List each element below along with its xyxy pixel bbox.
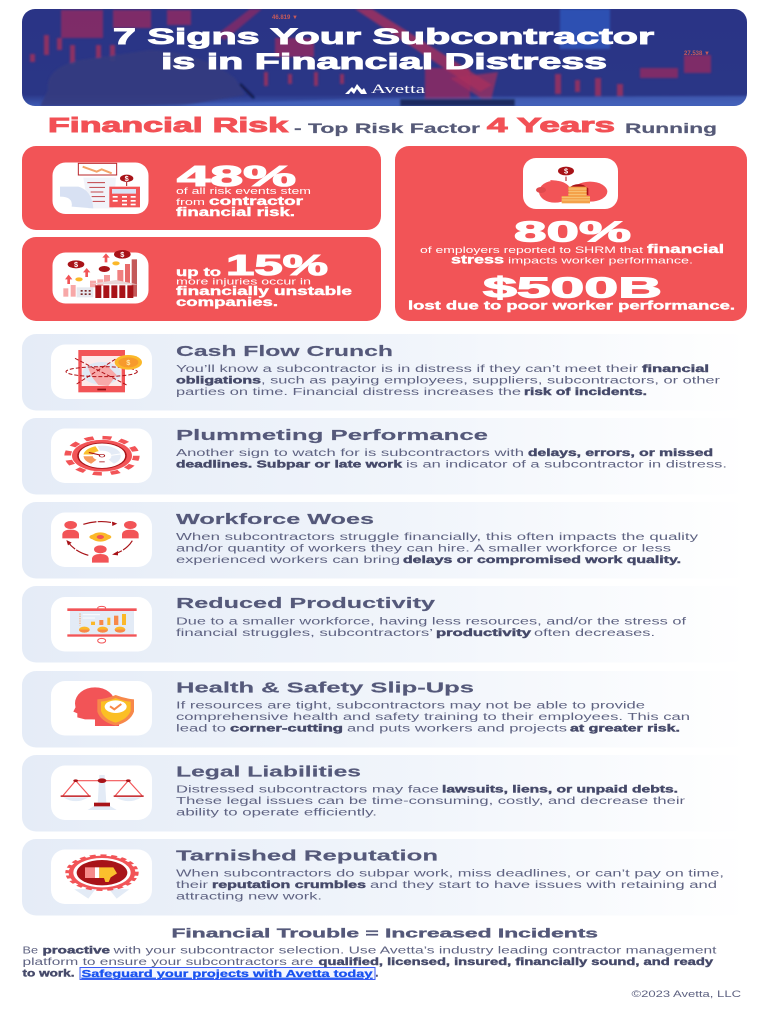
stat text [176, 250, 352, 309]
body text: lead to [176, 724, 227, 734]
body text [176, 616, 686, 639]
subtitle: Financial Risk [48, 115, 290, 137]
stat text: 80%: impacts worker performance. [508, 256, 693, 266]
stat text: of all risk events stem [176, 186, 311, 197]
subtitle: 4 Years [487, 115, 615, 137]
body text: at greater risk. [570, 724, 680, 734]
icon: phone with coin [51, 344, 152, 399]
panel: Tarnished Reputation [22, 839, 748, 916]
banner background image [22, 9, 747, 106]
panel: Cash Flow Crunch [22, 334, 748, 410]
panel: 15% stat [22, 237, 381, 321]
panel: Legal Liabilities [22, 755, 748, 832]
icon: scales of justice [51, 766, 152, 820]
closing paragraph [22, 946, 717, 980]
body text: financial [642, 364, 709, 375]
icon: growth chart and bank: $ [120, 250, 124, 259]
panel: 80% and $500B stats [395, 146, 747, 321]
body text: reputation crumbles [212, 880, 367, 891]
body text: When subcontractors struggle financially, this often impacts the quality [176, 532, 698, 543]
body text: experienced workers can bring [176, 555, 400, 566]
body text: lawsuits, liens, or unpaid debts. [442, 784, 678, 796]
subtitle: - Top Risk Factor [294, 120, 481, 136]
body text: , such as paying employees, suppliers, subcontractors, or other [261, 376, 721, 386]
body text: ability to operate efficiently. [176, 808, 377, 818]
closing heading: Financial Trouble = Increased Incidents [172, 926, 598, 940]
body text: and puts workers and projects [347, 724, 567, 734]
stat text: $500B: $500B [483, 272, 662, 304]
body text: obligations [176, 376, 262, 386]
body text: parties on time. Financial distress increases the [176, 387, 522, 398]
panel: Workforce Woes [22, 502, 748, 578]
body text: and/or quantity of workers they can hire. A smaller workforce or less [176, 544, 671, 554]
closing paragraph: . [376, 968, 378, 980]
heading: Tarnished Reputation [176, 848, 438, 864]
closing paragraph: with your subcontractor selection. Use Avetta’s industry leading contractor management [112, 946, 717, 956]
icon: invoice and calculator [52, 162, 148, 214]
closing paragraph: Be [22, 946, 39, 956]
body text: If resources are tight, subcontractors may not be able to provide [176, 700, 646, 712]
body text [176, 868, 724, 902]
stat text: $500B: lost due to poor worker performance. [408, 300, 735, 312]
stat text: 80%: stress [451, 254, 504, 266]
body text: Another sign to watch for is subcontractors with [176, 448, 524, 459]
stat text: 48% [177, 161, 296, 193]
stat text: 15% [226, 250, 328, 282]
body text [176, 364, 721, 398]
stat text: 80%: financial [647, 244, 724, 256]
body text [176, 700, 690, 734]
body text: delays or compromised work quality. [403, 555, 681, 566]
Avetta logo: Avetta [371, 81, 425, 96]
icon: head with shield [51, 681, 152, 736]
stat text: companies. [176, 297, 278, 309]
icon: invoice and calculator: $ [125, 174, 129, 183]
body text: Distressed subcontractors may face [176, 784, 440, 796]
copyright: ©2023 Avetta, LLC [632, 989, 741, 1000]
stat text [176, 161, 311, 219]
stat text: up to [176, 267, 221, 279]
stat text: $500B [408, 272, 735, 312]
stat text: financial risk. [176, 207, 295, 219]
header banner [22, 9, 747, 106]
heading: Workforce Woes [176, 511, 374, 528]
link: Safeguard your projects [80, 968, 375, 980]
panel: Reduced Productivity [22, 586, 748, 662]
subtitle [48, 115, 717, 137]
body text: productivity [436, 628, 532, 639]
stat text: 80%: of employers reported to SHRM that [420, 245, 644, 256]
body text [176, 784, 686, 818]
heading: Legal Liabilities [176, 764, 361, 780]
stat text: contractor [209, 196, 304, 208]
title: 7 Signs Your Subcontractor [113, 24, 655, 49]
Avetta logo [345, 81, 425, 96]
subtitle: Running [625, 120, 717, 136]
body text: attracting new work. [176, 892, 322, 902]
icon: thumbs-down badge [51, 850, 152, 904]
link: Safeguard your projects: Safeguard your projects with Avetta today [82, 969, 373, 980]
heading: Health & Safety Slip-Ups [176, 680, 474, 696]
closing paragraph: to work. [22, 968, 75, 980]
title: is in Financial Distress [161, 49, 607, 74]
closing paragraph: qualified, licensed, insured, financially sound, and ready [318, 957, 714, 968]
panel: Plummeting Performance [22, 418, 748, 494]
panel: 48% stat [22, 146, 381, 230]
body text: deadlines. Subpar or late work [176, 460, 403, 470]
heading: Cash Flow Crunch [176, 343, 393, 360]
closing paragraph: platform to ensure your subcontractors are [22, 957, 314, 968]
body text [176, 532, 698, 566]
body text: is an indicator of a subcontractor in distress. [406, 460, 727, 470]
icon: gauge gear [51, 428, 152, 483]
title [113, 24, 655, 74]
icon: phone with coin: $ [126, 358, 130, 367]
heading: Reduced Productivity [176, 595, 436, 612]
stat text: from [176, 197, 205, 208]
stat text: 80%: 80% [514, 216, 631, 248]
body text: their [176, 880, 209, 891]
closing paragraph: proactive [42, 946, 111, 956]
body text: and they start to have issues with retaining and [370, 880, 717, 891]
body text: comprehensive health and safety training to their employees. This can [176, 712, 690, 723]
stat text: more injuries occur in [176, 276, 311, 288]
heading: Plummeting Performance [176, 427, 488, 444]
stat text: 80% [420, 216, 724, 266]
stat text: financially unstable [176, 286, 352, 298]
body text: often decreases. [534, 628, 655, 639]
body text: corner-cutting [230, 724, 343, 734]
body text: financial struggles, subcontractors’ [176, 628, 433, 639]
body text: risk of incidents. [524, 387, 647, 398]
icon: piggy bank: $ [564, 167, 568, 176]
icon: growth chart and bank: $ [74, 260, 78, 269]
body text: These legal issues can be time-consuming, costly, and decrease their [176, 796, 686, 807]
banner background image: 27.538 ▼ [684, 51, 710, 57]
banner background image: 46.819 ▼ [272, 15, 298, 21]
body text: You’ll know a subcontractor is in distress if they can’t meet their [176, 364, 639, 375]
icon: growth chart and bank [52, 250, 148, 304]
body text: When subcontractors do subpar work, miss deadlines, or can’t pay on time, [176, 868, 724, 880]
icon: piggy bank [523, 158, 618, 209]
body text: delays, errors, or missed [528, 448, 713, 459]
body text [176, 448, 727, 470]
panel: Health & Safety Slip-Ups [22, 671, 748, 748]
icon: presentation board [51, 597, 152, 652]
body text: Due to a smaller workforce, having less resources, and/or the stress of [176, 616, 686, 628]
icon: people cycle [51, 512, 152, 567]
